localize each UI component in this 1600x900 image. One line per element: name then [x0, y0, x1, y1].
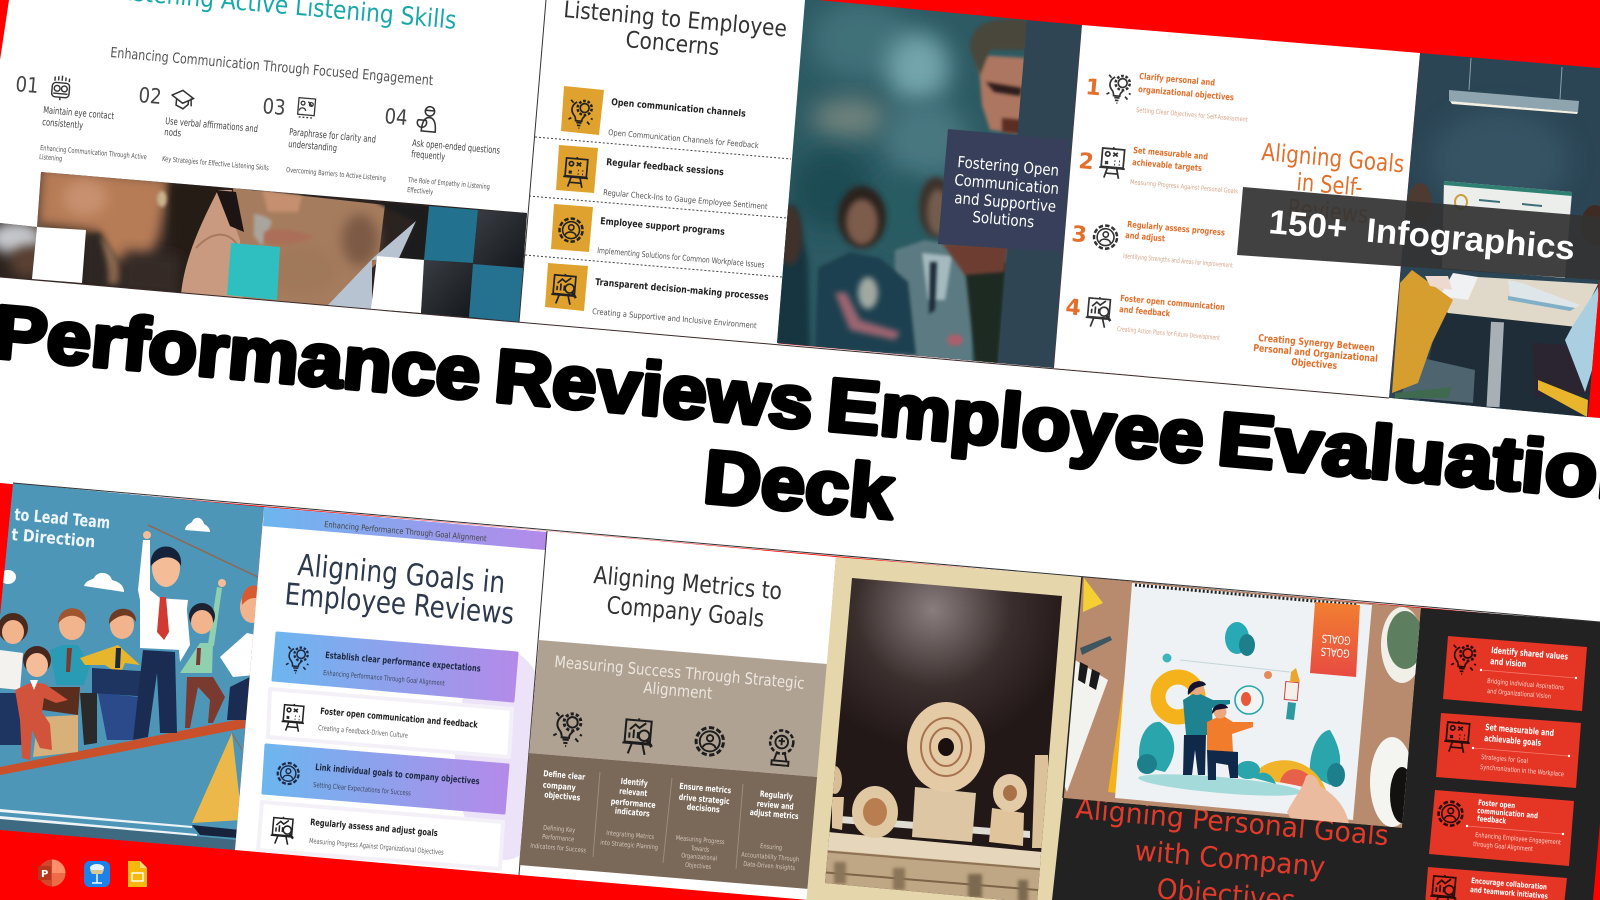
column 2: relevant — [619, 786, 648, 798]
item 2 — [556, 145, 768, 211]
wall screen — [1442, 181, 1572, 278]
right figure in foreground — [965, 262, 1006, 365]
column 4: Ensuring — [760, 842, 782, 852]
heading: Concerns — [624, 27, 720, 61]
card 1: Establish clear performance expectations — [325, 651, 481, 675]
panel: cartoon team slide — [0, 483, 264, 850]
goal 4 — [1064, 294, 1225, 342]
lavender background shape — [455, 650, 535, 860]
heading: Aligning Metrics to — [592, 561, 783, 605]
card 4: Measuring Progress Against Organizational Objectives — [309, 837, 444, 857]
column 4: adjust metrics — [749, 807, 799, 821]
footer statement: Objectives — [1291, 357, 1338, 372]
goal 4: Foster open communication — [1120, 294, 1225, 313]
step 02: nods — [164, 127, 182, 139]
column 4: Regularly — [759, 789, 794, 801]
column 3: Towards — [690, 844, 710, 854]
color squares — [32, 206, 527, 322]
footer statement — [1253, 333, 1378, 372]
step 04: Ask open-ended questions — [412, 138, 500, 157]
white middle band — [0, 275, 1600, 623]
tan band: Alignment — [643, 678, 713, 703]
man on right — [220, 586, 258, 720]
goal 1 — [1084, 72, 1248, 124]
heading: with Company — [1133, 834, 1327, 884]
header bar: Enhancing Performance Through Goal Alignment — [324, 520, 487, 543]
callout box: and Supportive — [954, 189, 1057, 216]
heading: Company Goals — [605, 591, 765, 633]
floor under table — [1420, 310, 1600, 420]
orange goals tag: GOALS — [1321, 631, 1351, 647]
step 01: consistently — [42, 117, 84, 132]
goal 4: and feedback — [1119, 305, 1171, 319]
column 1: Performance — [542, 833, 574, 843]
goal 2: Measuring Progress Against Personal Goals — [1130, 178, 1239, 195]
red corner at right of top row — [1588, 277, 1600, 418]
step 04: The Role of Empathy in Listening — [407, 176, 490, 191]
footer statement: Creating Synergy Between — [1258, 333, 1375, 354]
card 2 — [268, 689, 512, 757]
column 1: Defining Key — [543, 824, 576, 834]
icon: Keynote — [84, 861, 110, 887]
callout box — [938, 129, 1070, 252]
goal 2: Set measurable and — [1133, 146, 1208, 163]
red card 3: Enhancing Employee Engagement — [1475, 831, 1562, 847]
title: Employee — [824, 362, 1207, 479]
step 01 — [15, 72, 147, 163]
title: Evaluation — [1215, 396, 1600, 518]
pendant lamp — [1449, 58, 1579, 114]
panel: target photo slide — [806, 557, 1082, 900]
goal 4: Creating Action Plans for Future Development — [1117, 325, 1220, 342]
top edge line of the lower row — [13, 483, 1600, 622]
step 02: 02 — [138, 83, 163, 109]
red card 1: and vision — [1490, 657, 1526, 670]
heading: Aligning Goals in — [296, 548, 507, 601]
red card 3 — [1429, 790, 1574, 866]
red card 3: Foster open — [1478, 798, 1515, 810]
card 1 — [273, 633, 517, 701]
step 02: Key Strategies for Effective Listening Skills — [162, 155, 269, 172]
panel: employee concerns slide — [519, 0, 806, 345]
clouds — [0, 518, 210, 592]
badge: 150+ Infographics — [1237, 187, 1600, 280]
icon: PowerPoint: P — [41, 869, 48, 880]
step 04: frequently — [411, 149, 446, 163]
woman on far left — [0, 613, 28, 745]
photo of wooden target — [820, 570, 1070, 900]
hand — [1287, 775, 1350, 830]
card 2: Foster open communication and feedback — [320, 707, 479, 731]
column 3: Objectives — [685, 861, 712, 871]
card 4 — [258, 802, 503, 869]
title: Reviews — [492, 333, 817, 445]
photo: blurred team and man — [775, 0, 1030, 365]
leader — [133, 531, 190, 740]
header bar — [263, 507, 547, 550]
badge: 150+ Infographics: 150+ Infographics — [1267, 203, 1576, 268]
notebook page — [1115, 583, 1372, 820]
red card 1: Bridging Individual Aspirations — [1487, 677, 1565, 692]
man: hair and collar — [376, 200, 428, 260]
red card 1: Identify shared values — [1491, 646, 1568, 663]
goal 3 — [1070, 220, 1233, 270]
team of people — [0, 531, 264, 760]
column 4 — [741, 789, 799, 872]
item 4: Creating a Supportive and Inclusive Environment — [592, 307, 757, 330]
step 04: 04 — [384, 104, 409, 130]
callout box: Solutions — [972, 208, 1035, 231]
column 2: performance — [610, 796, 656, 810]
woman in red — [15, 646, 68, 760]
column 3: Organizational — [681, 851, 718, 863]
goal 2 — [1077, 146, 1239, 195]
goal 3: 3 — [1070, 222, 1088, 248]
step 03 — [262, 94, 386, 183]
column 1: objectives — [544, 789, 581, 803]
item 1: Open Communication Channels for Feedback — [608, 128, 759, 150]
step 03: Paraphrase for clarity and — [289, 127, 376, 146]
panel: aligning goals in self-reviews slide — [1054, 25, 1420, 398]
item 3: Employee support programs — [600, 216, 725, 238]
card 3: Setting Clear Expectations for Success — [313, 781, 411, 798]
card 4: Regularly assess and adjust goals — [310, 818, 438, 839]
card 3: Link individual goals to company objectives — [315, 763, 480, 787]
man in suit — [893, 240, 975, 365]
woman — [36, 165, 170, 262]
item 1: Open communication channels — [611, 97, 746, 120]
orange goals tag: GOALS — [1320, 644, 1350, 660]
column 4: review and — [756, 798, 794, 812]
item 2: Regular feedback sessions — [606, 157, 725, 178]
dark strip — [998, 20, 1082, 368]
goal 1: Clarify personal and — [1139, 72, 1215, 89]
heading: Employee Reviews — [283, 577, 515, 632]
goal 2: achievable targets — [1132, 158, 1202, 174]
red card 3: feedback — [1477, 814, 1507, 826]
red card 2: Strategies for Goal — [1481, 753, 1528, 765]
meeting table — [1434, 277, 1598, 326]
column 2: Identify — [620, 776, 649, 788]
goal 1: 1 — [1084, 75, 1102, 101]
man: hand and phone — [181, 190, 243, 300]
title — [0, 289, 1600, 535]
item 3 — [551, 204, 765, 270]
column 4: Accountability Through — [741, 850, 799, 864]
panel: aligning goals in employee reviews slide — [235, 507, 555, 875]
step 01: Listening — [39, 153, 62, 163]
step 03: 03 — [262, 94, 287, 120]
heading: in Self- — [1295, 168, 1364, 202]
step 04 — [384, 104, 500, 196]
man: face — [233, 188, 385, 310]
title: Deck — [701, 434, 898, 535]
illustration: notebook on desk — [1062, 577, 1423, 830]
column 3: Measuring Progress — [675, 834, 725, 846]
callout box: Communication — [954, 171, 1060, 198]
panel: fostering open communication photo slide — [775, 0, 1082, 368]
orange goals tag — [1310, 602, 1360, 677]
left person — [775, 205, 810, 350]
red card 2: Synchronization in the Workplace — [1480, 763, 1564, 778]
step 01: 01 — [15, 72, 40, 98]
item 2: Regular Check-Ins to Gauge Employee Sentiment — [603, 188, 768, 211]
column 2 — [600, 776, 658, 852]
red card 2 — [1436, 713, 1581, 788]
app icons — [38, 860, 147, 887]
heading: Aligning Goals — [1260, 138, 1405, 178]
step 01: Maintain eye contact — [43, 105, 115, 122]
card 3 — [263, 745, 508, 813]
step 03: understanding — [288, 139, 338, 154]
subheading: Enhancing Communication Through Focused Engagement — [110, 45, 434, 89]
column 3: Ensure metrics — [679, 781, 732, 795]
column 2: into Strategic Planning — [600, 838, 658, 852]
heading: Aligning Personal Goals — [1074, 792, 1390, 852]
man in teal shirt — [50, 608, 97, 745]
laptops — [1440, 273, 1478, 300]
card 2: Creating a Feedback-Driven Culture — [318, 724, 408, 740]
rope — [148, 525, 258, 577]
column 1: Indicators for Success — [530, 842, 587, 854]
heading — [283, 548, 515, 632]
red card 1 — [1443, 636, 1587, 711]
goal 2: 2 — [1077, 149, 1095, 175]
step 04: Effectively — [407, 186, 433, 196]
step 03: Overcoming Barriers to Active Listening — [286, 166, 386, 183]
column 2: Integrating Metrics — [606, 829, 655, 841]
tan band — [529, 640, 827, 777]
red card 3: through Goal Alignment — [1473, 840, 1534, 853]
red card 2: Set measurable and — [1485, 723, 1554, 739]
heading — [562, 0, 788, 61]
panel: meeting room photo — [1389, 53, 1600, 420]
red card 2: achievable goals — [1484, 734, 1541, 749]
goal 3: Regularly assess progress — [1127, 220, 1225, 239]
heading: Reviews — [1286, 194, 1370, 229]
shelf — [820, 832, 1050, 900]
heading — [592, 561, 783, 633]
plank — [0, 718, 245, 775]
card 1: Enhancing Performance Through Goal Alignment — [323, 669, 445, 688]
goal 1: organizational objectives — [1138, 85, 1234, 103]
column 3: drive strategic — [678, 792, 730, 806]
red card 1: and Organizational Vision — [1487, 687, 1551, 701]
brown columns — [519, 753, 818, 889]
panel: active listening slide — [0, 0, 546, 330]
column 4: Data-Driven Insights — [743, 860, 796, 872]
column 3 — [675, 781, 732, 871]
slide photo: man on the phone — [0, 172, 527, 322]
man looking over — [978, 55, 1028, 134]
column 1 — [530, 768, 587, 854]
heading — [1260, 138, 1405, 229]
footer statement: Personal and Organizational — [1253, 343, 1378, 365]
goal 3: and adjust — [1125, 231, 1165, 244]
step 01: Enhancing Communication Through Active — [40, 144, 147, 161]
item 4 — [545, 263, 769, 330]
sailboat — [192, 733, 242, 838]
desk items — [1062, 578, 1423, 827]
goal 3: Identifying Strengths and Areas for Improvement — [1123, 252, 1233, 270]
water stripes — [0, 809, 237, 850]
red card 4 — [1425, 867, 1567, 900]
panel: personal goals slide — [1052, 577, 1600, 900]
heading: to Lead Team — [14, 505, 111, 532]
callout box: Fostering Open — [957, 153, 1060, 180]
item 3: Implementing Solutions for Common Workplace Issues — [597, 246, 765, 270]
goal 4: 4 — [1064, 295, 1082, 321]
column 1: company — [542, 780, 577, 792]
column 1: Define clear — [543, 768, 586, 782]
column 2: indicators — [614, 806, 650, 819]
panel: aligning metrics slide — [519, 531, 836, 900]
heading — [1074, 792, 1390, 900]
goal 1: Setting Clear Objectives for Self-Assessment — [1136, 106, 1248, 124]
icon: Google Slides — [128, 861, 147, 887]
heading: t Direction — [11, 525, 96, 551]
people — [1392, 183, 1600, 417]
step 02: Use verbal affirmations and — [165, 116, 258, 135]
man in green shirt — [180, 579, 226, 728]
woman — [815, 252, 916, 355]
boxes and suitcase — [33, 687, 80, 757]
heading — [12, 508, 110, 548]
item 1 — [561, 86, 759, 150]
chart art and figures — [1137, 622, 1345, 800]
red card 4: Encourage collaboration — [1471, 876, 1547, 892]
title: Performance — [0, 289, 484, 415]
step 02 — [138, 83, 269, 172]
item 4: Transparent decision-making processes — [595, 277, 769, 303]
red card 3: communication and — [1477, 806, 1538, 820]
column 3: decisions — [686, 802, 720, 814]
man in yellow shirt — [80, 608, 141, 740]
tan band: Measuring Success Through Strategic — [554, 652, 805, 693]
